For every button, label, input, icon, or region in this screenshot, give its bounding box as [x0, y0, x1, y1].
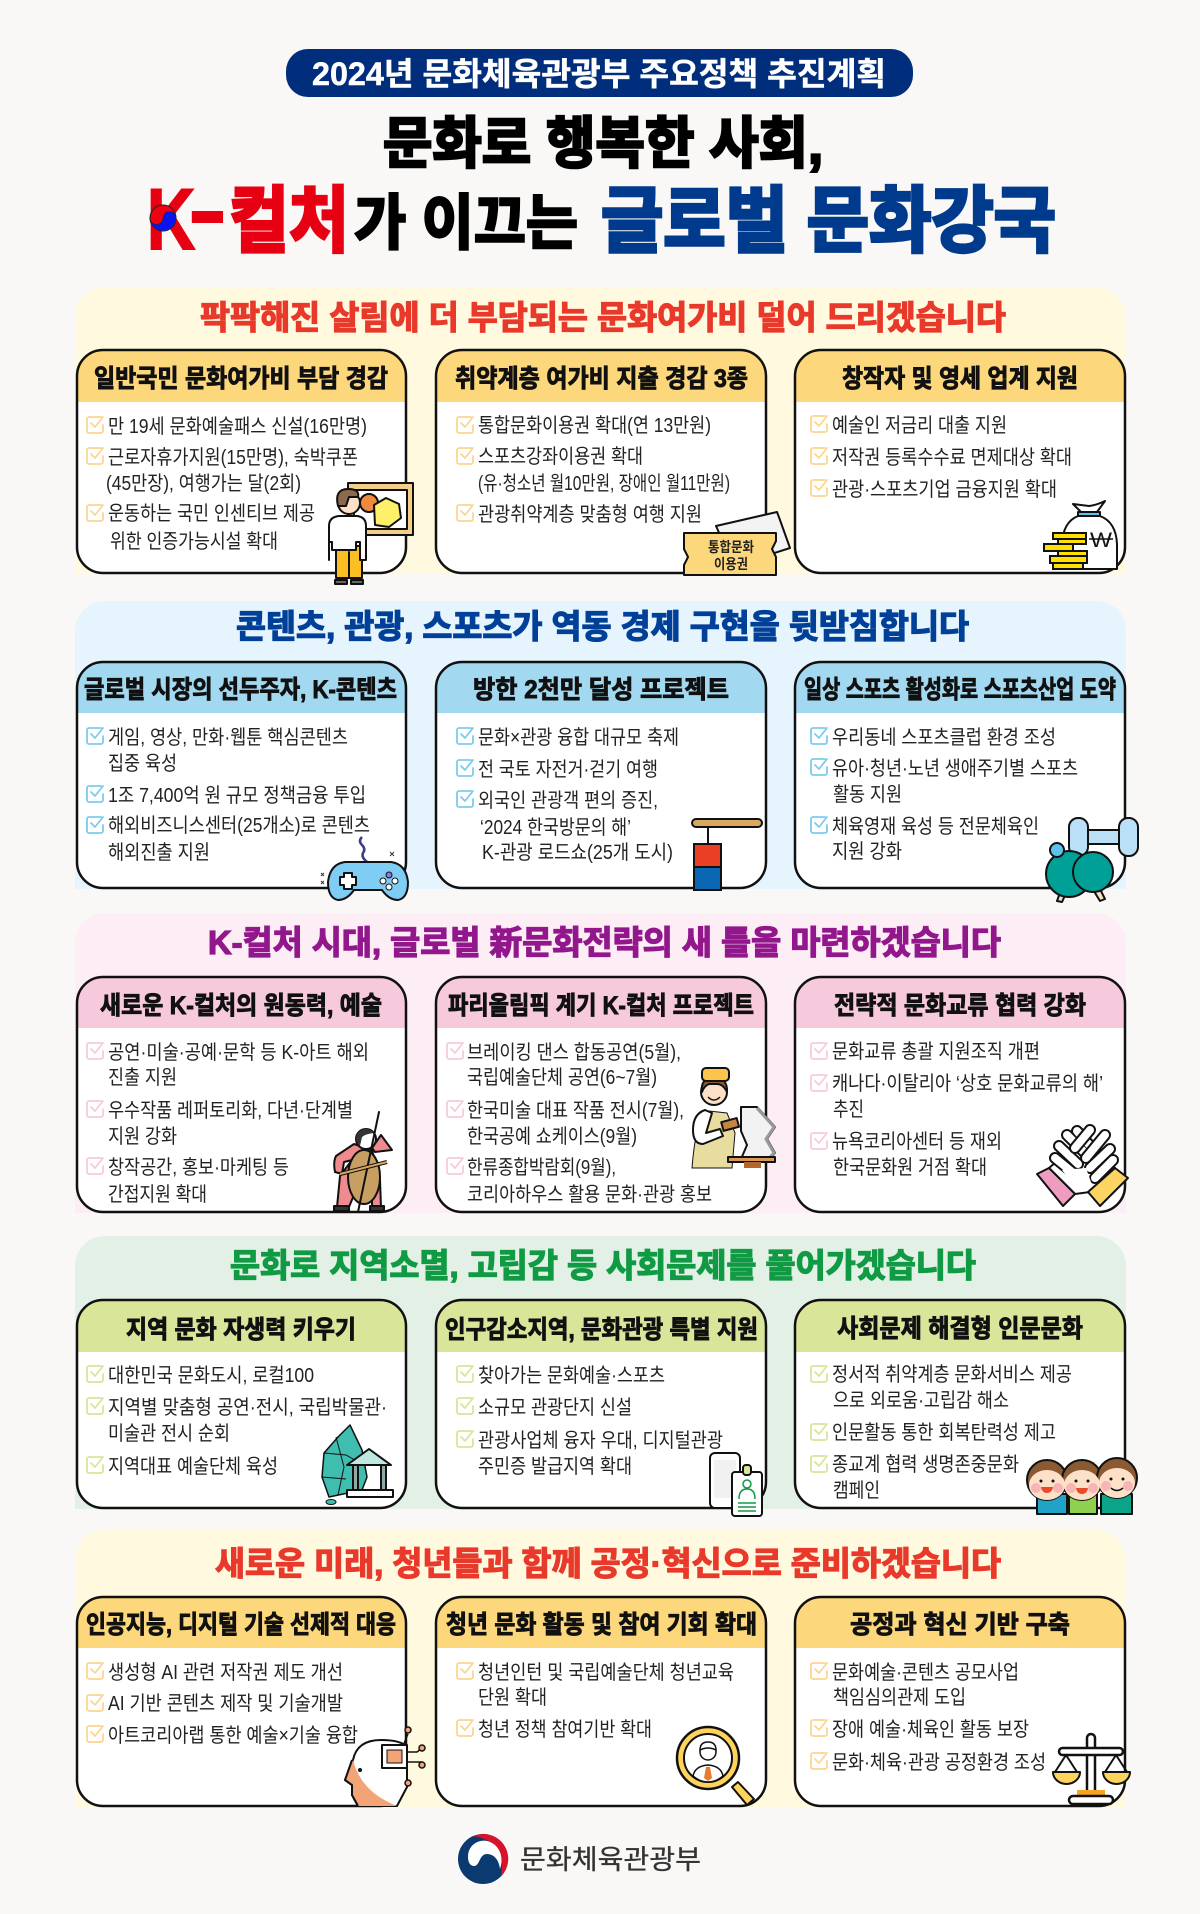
card: arts	[77, 977, 406, 1212]
card title: 지역 문화 자생력 키우기	[126, 1316, 356, 1344]
list	[811, 414, 1072, 501]
icon: game controller	[321, 837, 408, 900]
section heading: 문화로 지역소멸, 고립감 등 사회문제를 풀어가겠습니다	[230, 1247, 976, 1284]
list: 캠페인	[833, 1479, 880, 1502]
card title: 일반국민 문화여가비 부담 경감	[94, 365, 388, 393]
section heading: K-컬처 시대, 글로벌 新문화전략의 새 틀을 마련하겠습니다	[208, 924, 1001, 961]
list: 한국공예 쇼케이스(9월)	[467, 1125, 637, 1148]
main title: 가 이끄는	[354, 190, 578, 257]
card title: 방한 2천만 달성 프로젝트	[473, 676, 729, 704]
card title: 공정과 혁신 기반 구축	[850, 1611, 1070, 1639]
section heading: 콘텐츠, 관광, 스포츠가 역동 경제 구현을 뒷받침합니다	[236, 608, 969, 645]
card: Paris Olympics project	[436, 977, 775, 1212]
card: creators and small business	[795, 350, 1125, 573]
icon: cello player	[334, 1112, 392, 1212]
card title: 글로벌 시장의 선두주자, K-콘텐츠	[84, 676, 397, 704]
list: 미술관 전시 순회	[108, 1422, 230, 1445]
card: humanities for social problems	[795, 1300, 1137, 1514]
card: general public	[77, 350, 413, 584]
footer logo	[458, 1834, 701, 1884]
icon: three children	[1027, 1458, 1137, 1514]
list	[457, 726, 679, 864]
list: 문화·체육·관광 공정환경 조성	[832, 1751, 1046, 1774]
icon: AI head with chip	[345, 1727, 425, 1806]
card title: 전략적 문화교류 협력 강화	[834, 992, 1086, 1020]
list: 지원 강화	[108, 1125, 177, 1148]
list: 만 19세 문화예술패스 신설(16만명)	[108, 415, 367, 438]
list: 책임심의관제 도입	[833, 1686, 966, 1709]
list: 우리동네 스포츠클럽 환경 조성	[832, 726, 1056, 749]
main title	[147, 112, 1056, 268]
list: 장애 예술·체육인 활동 보장	[832, 1718, 1029, 1741]
list: 우수작품 레퍼토리화, 다년·단계별	[108, 1099, 353, 1122]
icon: dumbbell and table tennis paddles	[1046, 818, 1138, 902]
card: cultural exchange	[795, 977, 1128, 1212]
list: 근로자휴가지원(15만명), 숙박쿠폰	[108, 446, 358, 469]
list: 문화교류 총괄 지원조직 개편	[832, 1040, 1040, 1063]
list: 창작공간, 홍보·마케팅 등	[108, 1156, 289, 1179]
list: 캐나다·이탈리아 ‘상호 문화교류의 해’	[832, 1072, 1103, 1095]
title badge: 2024년 문화체육관광부 주요정책 추진계획	[312, 56, 886, 92]
panel: regional and social issues	[75, 1236, 1137, 1516]
main title: 문화로 행복한 사회,	[383, 112, 823, 175]
card: depopulation regions	[436, 1300, 766, 1516]
list: 찾아가는 문화예술·스포츠	[478, 1364, 665, 1387]
icon: red and blue post	[692, 819, 762, 891]
icon: culture voucher ticket: 통합문화	[708, 539, 754, 555]
title badge	[286, 49, 913, 97]
list: 한류종합박람회(9월),	[467, 1156, 616, 1179]
list	[87, 726, 370, 864]
card: regional self-reliance	[77, 1300, 406, 1508]
card title: 청년 문화 활동 및 참여 기회 확대	[446, 1611, 757, 1639]
card title: 새로운 K-컬처의 원동력, 예술	[100, 992, 382, 1020]
list: 문화예술·콘텐츠 공모사업	[832, 1661, 1019, 1684]
list: 추진	[833, 1098, 864, 1121]
list: 대한민국 문화도시, 로컬100	[108, 1364, 314, 1387]
list: 예술인 저금리 대출 지원	[832, 414, 1007, 437]
list: 주민증 발급지역 확대	[478, 1455, 632, 1478]
list: 지역별 맞춤형 공연·전시, 국립박물관·	[108, 1396, 387, 1419]
list: 종교계 협력 생명존중문화	[832, 1453, 1019, 1476]
list: 으로 외로움·고립감 해소	[833, 1389, 1009, 1412]
list	[87, 1661, 358, 1747]
footer logo: 문화체육관광부	[520, 1845, 701, 1875]
main title: 컬처	[229, 182, 349, 262]
list: 청년 정책 참여기반 확대	[478, 1718, 652, 1741]
icon: money bag and coins	[1044, 501, 1117, 569]
card: AI and digital	[77, 1597, 425, 1806]
list: 관광·스포츠기업 금융지원 확대	[832, 478, 1057, 501]
icon: man viewing painting	[329, 483, 413, 584]
icon: taegeuk on K	[150, 205, 176, 231]
card title: 일상 스포츠 활성화로 스포츠산업 도약	[804, 676, 1116, 704]
list: 국립예술단체 공연(6~7월)	[467, 1066, 657, 1089]
list: 위한 인증가능시설 확대	[110, 530, 278, 553]
list	[457, 1364, 723, 1478]
card: fairness and innovation	[795, 1597, 1130, 1806]
list: 정서적 취약계층 문화서비스 제공	[832, 1363, 1072, 1386]
list: 소규모 관광단지 신설	[478, 1396, 632, 1419]
list: 코리아하우스 활용 문화·관광 홍보	[467, 1183, 712, 1206]
main title: K	[147, 172, 195, 268]
card: youth participation	[436, 1597, 766, 1806]
list: 인문활동 통한 회복탄력성 제고	[832, 1421, 1056, 1444]
card title: 창작자 및 영세 업계 지원	[842, 365, 1078, 393]
icon: phone and ID card	[710, 1453, 762, 1516]
list	[87, 1041, 369, 1206]
icon: government taegeuk emblem	[458, 1834, 508, 1884]
panel: living cost	[75, 287, 1126, 584]
list	[87, 1364, 387, 1478]
icon: magnifying glass with person	[677, 1727, 754, 1805]
main title: -	[187, 153, 228, 265]
list: 스포츠강좌이용권 확대	[478, 445, 643, 468]
card title: 인구감소지역, 문화관광 특별 지원	[445, 1316, 758, 1344]
list: 지역대표 예술단체 육성	[108, 1455, 278, 1478]
list: 게임, 영상, 만화·웹툰 핵심콘텐츠	[108, 726, 348, 749]
card: vulnerable groups	[436, 350, 790, 575]
list: (유·청소년 월10만원, 장애인 월11만원)	[478, 472, 730, 495]
list: 한국문화원 거점 확대	[833, 1156, 987, 1179]
card title: 사회문제 해결형 인문문화	[837, 1315, 1083, 1343]
list: 관광사업체 융자 우대, 디지털관광	[478, 1429, 723, 1452]
card title: 파리올림픽 계기 K-컬처 프로젝트	[448, 992, 754, 1020]
list: 간접지원 확대	[108, 1183, 207, 1206]
list: 1조 7,400억 원 규모 정책금융 투입	[108, 784, 366, 807]
list: 뉴욕코리아센터 등 재외	[832, 1130, 1002, 1153]
list: 활동 지원	[833, 783, 902, 806]
list: AI 기반 콘텐츠 제작 및 기술개발	[108, 1692, 343, 1715]
panel: future, youth, fairness	[75, 1530, 1130, 1807]
list: 생성형 AI 관련 저작권 제도 개선	[108, 1661, 343, 1684]
card: 20 million visitors	[436, 662, 766, 891]
list: 외국인 관광객 편의 증진,	[478, 789, 658, 812]
icon: culture voucher ticket	[684, 512, 790, 575]
list: 진출 지원	[108, 1066, 177, 1089]
main title: 글로벌 문화강국	[601, 182, 1056, 262]
list: 단원 확대	[478, 1686, 547, 1709]
list: 체육영재 육성 등 전문체육인	[832, 815, 1039, 838]
list: 관광취약계층 맞춤형 여행 지원	[478, 503, 702, 526]
list: 해외비즈니스센터(25개소)로 콘텐츠	[108, 814, 370, 837]
panel: new culture strategy	[75, 913, 1128, 1213]
list: 전 국토 자전거·걷기 여행	[478, 758, 658, 781]
list: 집중 육성	[108, 752, 177, 775]
icon: sculptor	[692, 1068, 775, 1168]
list	[811, 1363, 1072, 1502]
panel: content, tourism, sports	[75, 601, 1138, 902]
list: 통합문화이용권 확대(연 13만원)	[478, 414, 711, 437]
list	[811, 726, 1078, 863]
list	[457, 414, 730, 526]
icon: scales of justice	[1053, 1734, 1130, 1804]
list: ‘2024 한국방문의 해’	[480, 816, 631, 839]
list	[811, 1040, 1103, 1179]
list: 공연·미술·공예·문학 등 K-아트 해외	[108, 1041, 369, 1064]
section heading: 팍팍해진 살림에 더 부담되는 문화여가비 덜어 드리겠습니다	[200, 299, 1006, 336]
list	[87, 415, 367, 553]
list: 브레이킹 댄스 합동공연(5월),	[467, 1041, 681, 1064]
list	[447, 1041, 712, 1206]
section heading: 새로운 미래, 청년들과 함께 공정·혁신으로 준비하겠습니다	[215, 1545, 1001, 1582]
card title: 취약계층 여가비 지출 경감 3종	[455, 365, 748, 393]
icon: clasped hands	[1037, 1130, 1128, 1206]
card: global K-content	[77, 662, 408, 900]
list: 한국미술 대표 작품 전시(7월),	[467, 1099, 684, 1122]
card title: 인공지능, 디지털 기술 선제적 대응	[86, 1611, 396, 1639]
list: 청년인턴 및 국립예술단체 청년교육	[478, 1661, 734, 1684]
list: 지원 강화	[832, 840, 902, 863]
list: 해외진출 지원	[108, 841, 210, 864]
list: 유아·청년·노년 생애주기별 스포츠	[832, 757, 1078, 780]
list: 운동하는 국민 인센티브 제공	[108, 502, 315, 525]
list: 저작권 등록수수료 면제대상 확대	[832, 446, 1072, 469]
card: everyday sports	[795, 662, 1138, 902]
icon: Korea map and museum	[322, 1425, 393, 1504]
list	[457, 1661, 734, 1741]
list: (45만장), 여행가는 달(2회)	[106, 472, 301, 495]
list	[811, 1661, 1046, 1774]
list: 아트코리아랩 통한 예술×기술 융합	[108, 1724, 358, 1747]
list: K-관광 로드쇼(25개 도시)	[482, 841, 673, 864]
icon: culture voucher ticket: 이용권	[714, 556, 748, 572]
icon: money bag and coins: W	[1090, 529, 1112, 552]
list: 문화×관광 융합 대규모 축제	[478, 726, 679, 749]
